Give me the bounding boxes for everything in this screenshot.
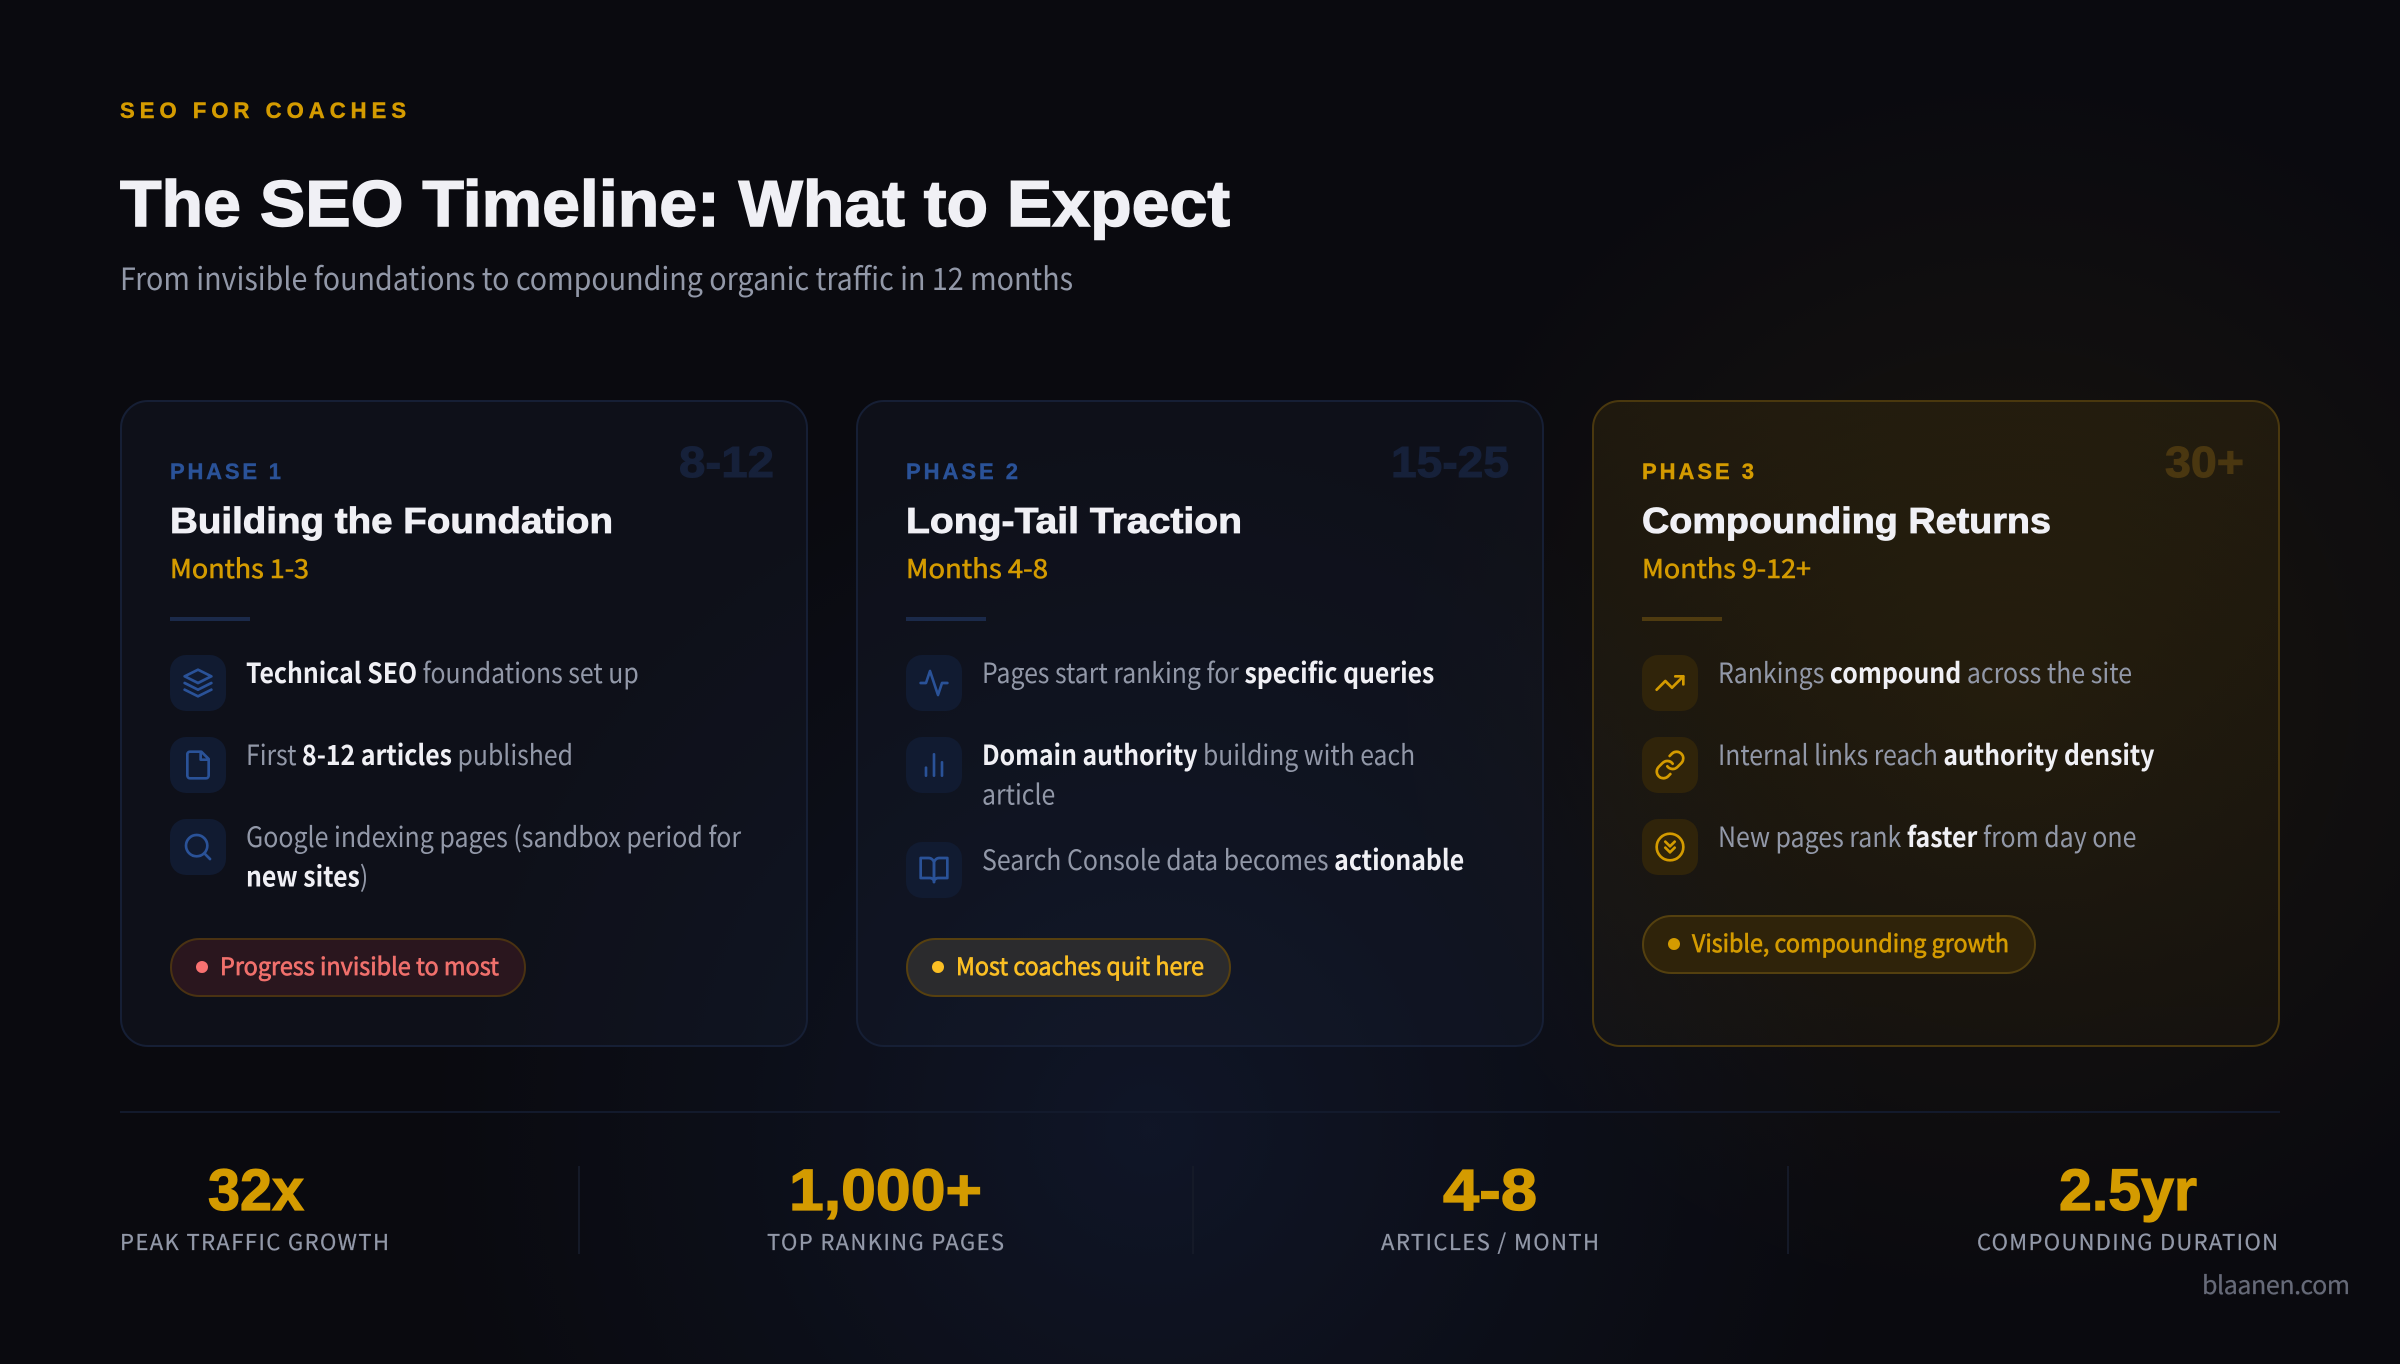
phase label: PHASE 3: [1642, 459, 1754, 484]
ghost number: 8-12: [679, 438, 774, 487]
item: domain authority: [906, 732, 1415, 813]
icon: chevrons in circle: [1642, 819, 1698, 875]
ghost number: 15-25: [1391, 438, 1509, 487]
item: new pages: [1642, 814, 2136, 875]
icon: bar chart: [906, 737, 962, 793]
months: Months 4-8: [906, 549, 1048, 586]
eyebrow: SEO FOR COACHES: [120, 98, 406, 123]
panel: phase 1: [121, 401, 807, 1046]
badge: most coaches quit: [907, 939, 1230, 996]
badge: visible growth: [1643, 916, 2035, 973]
phase title: Building the Foundation: [170, 500, 613, 541]
phase title: Compounding Returns: [1642, 500, 2051, 541]
item: specific queries: [906, 650, 1434, 711]
panel: phase 3: [1593, 401, 2279, 1046]
months: Months 9-12+: [1642, 549, 1811, 586]
panel: phase 2: [857, 401, 1543, 1046]
stat: articles per month: 4-8: [1443, 1158, 1537, 1223]
item: internal links: Internal links reach authority density: [1718, 732, 2154, 773]
item: rankings compound: Rankings compound across the site: [1718, 650, 2132, 691]
item: first articles: [170, 732, 573, 793]
item: google indexing: Google indexing pages (sandbox period for: [246, 814, 742, 855]
item: new pages: New pages rank faster from day one: [1718, 814, 2136, 855]
footer credit: blaanen.com: [2202, 1266, 2350, 1302]
months: Months 1-3: [170, 549, 309, 586]
stat: top ranking pages: 1,000+: [789, 1158, 982, 1223]
badge: visible growth: Visible, compounding growth: [1692, 924, 2009, 959]
stat: articles per month: [1381, 1158, 1599, 1257]
header: [120, 98, 1230, 299]
item: domain authority: article: [982, 772, 1055, 813]
item: technical SEO: Technical SEO foundations set up: [246, 650, 639, 691]
subtitle: From invisible foundations to compounding organic traffic in 12 months: [120, 254, 1073, 299]
icon: layers: [170, 655, 226, 711]
stat: compounding duration: COMPOUNDING DURATION: [1977, 1225, 2278, 1257]
stats row: [120, 1158, 2278, 1257]
stat: peak traffic growth: 32x: [208, 1158, 304, 1223]
stat: articles per month: ARTICLES / MONTH: [1381, 1225, 1599, 1257]
item: domain authority: Domain authority building with each: [982, 732, 1415, 773]
item: specific queries: Pages start ranking for specific queries: [982, 650, 1434, 691]
phase label: PHASE 1: [170, 459, 281, 484]
phase title: Long-Tail Traction: [906, 500, 1242, 541]
badge: most coaches quit: Most coaches quit here: [956, 947, 1204, 982]
stat: top ranking pages: [767, 1158, 1004, 1257]
stat: top ranking pages: TOP RANKING PAGES: [767, 1225, 1004, 1257]
phase label: PHASE 2: [906, 459, 1018, 484]
icon: book: [906, 842, 962, 898]
item: google indexing: [170, 814, 742, 895]
item: first articles: First 8-12 articles published: [246, 732, 573, 773]
stat: compounding duration: 2.5yr: [2059, 1158, 2197, 1223]
icon: search: [170, 819, 226, 875]
icon: link: [1642, 737, 1698, 793]
badge: progress invisible: [171, 939, 525, 996]
icon: file: [170, 737, 226, 793]
badge: progress invisible: Progress invisible to most: [220, 947, 499, 982]
item: google indexing: new sites): [246, 854, 368, 895]
stat: peak traffic growth: [120, 1158, 389, 1257]
item: rankings compound: [1642, 650, 2132, 711]
item: technical SEO: [170, 650, 639, 711]
item: search console: [906, 837, 1464, 898]
stat: peak traffic growth: PEAK TRAFFIC GROWTH: [120, 1225, 389, 1257]
item: internal links: [1642, 732, 2154, 793]
stat: compounding duration: [1977, 1158, 2278, 1257]
title: The SEO Timeline: What to Expect: [120, 167, 1230, 240]
item: search console: Search Console data becomes actionable: [982, 837, 1464, 878]
icon: trending up: [1642, 655, 1698, 711]
ghost number: 30+: [2165, 438, 2244, 487]
icon: activity: [906, 655, 962, 711]
